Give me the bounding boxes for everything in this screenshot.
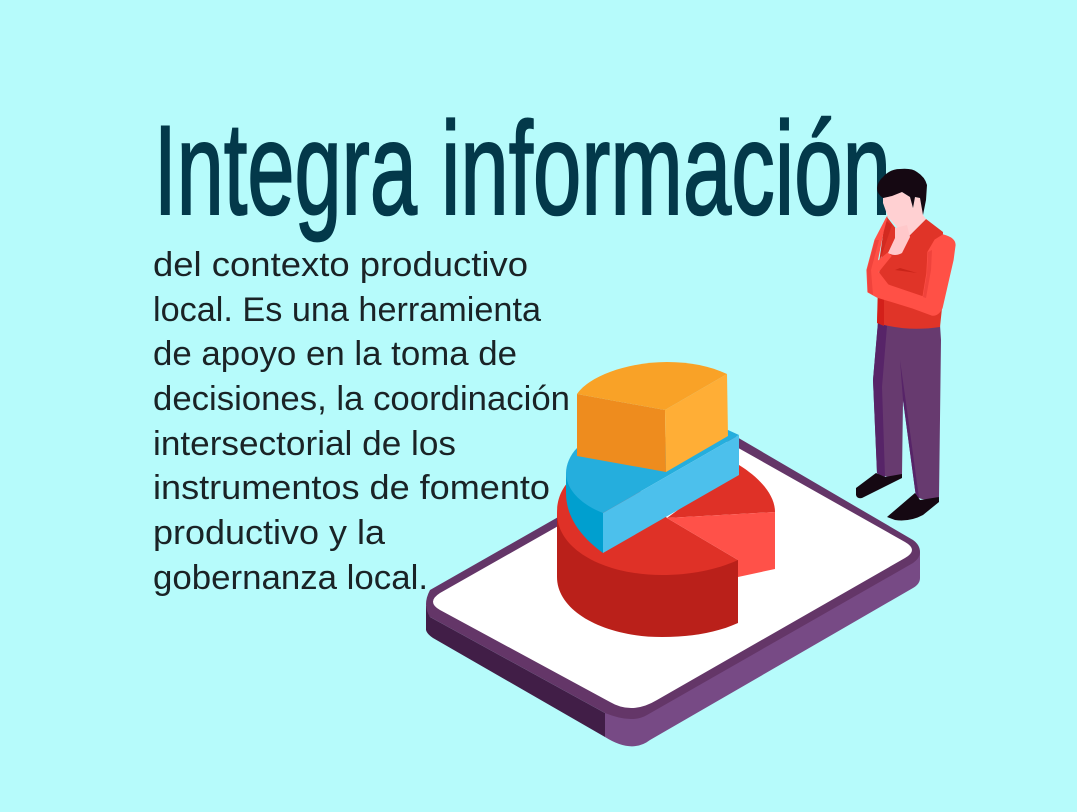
blue slice side — [566, 473, 603, 553]
hair — [877, 169, 927, 215]
body text block: gobernanza local. — [153, 559, 428, 597]
orange block front — [577, 394, 666, 472]
trousers — [873, 322, 941, 500]
neck and face — [883, 192, 926, 237]
red slice top — [557, 460, 738, 575]
red slice side — [557, 513, 738, 637]
body text block: del contexto productivo — [153, 246, 528, 284]
pie chart — [557, 362, 775, 637]
body text block: intersectorial de los — [153, 425, 456, 463]
blue slice front — [603, 435, 739, 553]
body text block — [153, 246, 570, 597]
body text block: productivo y la — [153, 514, 385, 552]
sweater torso — [877, 217, 943, 329]
red upper slice top — [667, 465, 775, 518]
orange block side — [665, 374, 728, 472]
body text block: instrumentos de fomento — [153, 469, 550, 507]
body text block: local. Es una herramienta — [153, 291, 541, 329]
body text block: decisiones, la coordinación — [153, 380, 570, 418]
body text block: de apoyo en la toma de — [153, 335, 517, 373]
platform tablet — [426, 426, 920, 746]
hand — [888, 225, 910, 255]
shoes — [856, 473, 902, 498]
orange block top — [577, 362, 727, 410]
blue slice top — [566, 430, 739, 513]
title: Integra — [154, 95, 417, 242]
sweater sleeves — [867, 217, 955, 315]
light red slice — [667, 512, 775, 577]
man thinking — [856, 169, 955, 520]
title — [154, 95, 891, 242]
